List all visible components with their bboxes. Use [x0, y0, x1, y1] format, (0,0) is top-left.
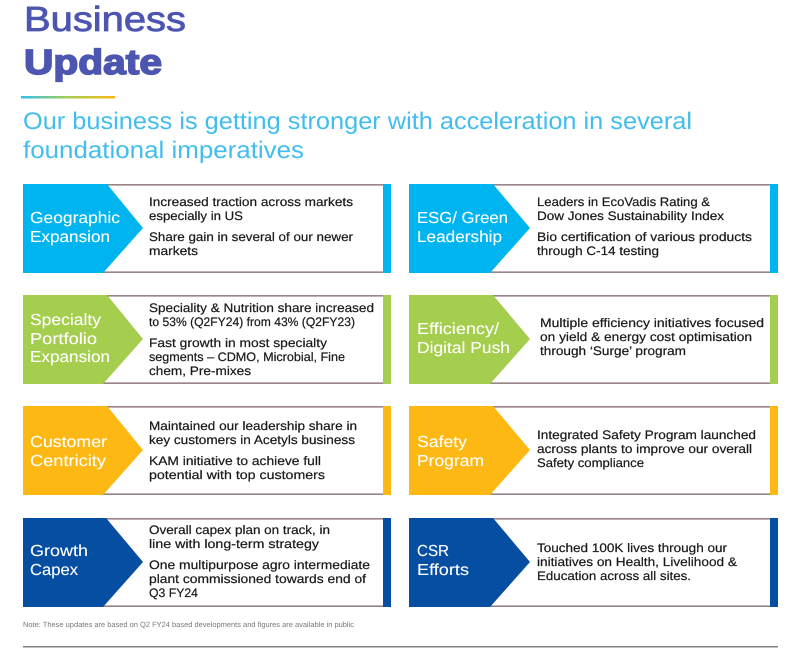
arrow label: specialty portfolio expansion: Portfolio: [30, 331, 97, 348]
text: customer centricity: Maintained our leadership share in: [149, 419, 357, 433]
text: efficiency digital push: on yield & energy cost optimisation: [540, 330, 752, 344]
arrow label: csr efforts: CSR: [417, 543, 449, 560]
arrow label: safety program: [409, 406, 530, 495]
text: geographic expansion: Increased traction across markets: [149, 195, 353, 209]
text: geographic expansion: Share gain in several of our newer: [149, 230, 353, 244]
text: growth capex: [149, 523, 370, 600]
panel: safety program: [409, 406, 778, 495]
panel: geographic expansion: [23, 184, 391, 273]
text: csr efforts: [537, 541, 738, 583]
subtitle: foundational imperatives: [23, 137, 304, 164]
arrow label: growth capex: Growth: [30, 543, 88, 560]
text: esg green leadership: Dow Jones Sustainability Index: [537, 209, 725, 223]
arrow label: geographic expansion: [23, 184, 143, 273]
footer rule: [23, 646, 778, 648]
text: efficiency digital push: through ‘Surge’ program: [540, 344, 686, 358]
text: growth capex: One multipurpose agro intermediate: [149, 558, 370, 572]
text: specialty portfolio expansion: segments – CDMO, Microbial, Fine: [149, 350, 345, 364]
arrow label: csr efforts: [409, 518, 530, 607]
text: geographic expansion: especially in US: [149, 209, 243, 223]
arrow label: customer centricity: Centricity: [30, 453, 106, 470]
text: growth capex: line with long-term strategy: [149, 537, 320, 551]
text: geographic expansion: markets: [149, 244, 198, 258]
arrow label: esg green leadership: Leadership: [417, 229, 502, 246]
text: customer centricity: KAM initiative to achieve full: [149, 454, 321, 468]
text: specialty portfolio expansion: to 53% (Q2FY24) from 43% (Q2FY23): [149, 315, 355, 329]
arrow label: safety program: Program: [417, 453, 484, 470]
text: specialty portfolio expansion: [149, 301, 374, 378]
text: esg green leadership: through C-14 testing: [537, 244, 659, 258]
text: efficiency digital push: Multiple efficiency initiatives focused: [540, 316, 764, 330]
arrow label: efficiency digital push: Efficiency/: [417, 321, 500, 338]
text: growth capex: Q3 FY24: [149, 586, 198, 600]
arrow label: safety program: Safety: [417, 434, 467, 451]
title: Update: [24, 43, 162, 82]
text: geographic expansion: [149, 195, 353, 258]
arrow label: efficiency digital push: Digital Push: [417, 340, 510, 357]
text: safety program: across plants to improve our overall: [537, 442, 752, 456]
text: csr efforts: Education across all sites.: [537, 569, 691, 583]
text: specialty portfolio expansion: Speciality & Nutrition share increased: [149, 301, 374, 315]
arrow label: esg green leadership: ESG/ Green: [417, 210, 508, 227]
text: esg green leadership: [537, 195, 752, 258]
subtitle: [23, 108, 692, 164]
arrow label: geographic expansion: Expansion: [30, 229, 110, 246]
arrow label: growth capex: [23, 518, 143, 607]
text: csr efforts: initiatives on Health, Livelihood &: [537, 555, 738, 569]
text: growth capex: Overall capex plan on track, in: [149, 523, 330, 537]
arrow label: efficiency digital push: [409, 295, 530, 384]
text: esg green leadership: Bio certification of various products: [537, 230, 752, 244]
text: specialty portfolio expansion: chem, Pre-mixes: [149, 364, 251, 378]
text: safety program: Safety compliance: [537, 456, 644, 470]
arrow label: specialty portfolio expansion: Specialty: [30, 312, 101, 329]
arrow label: esg green leadership: [409, 184, 530, 273]
footnote: Note: These updates are based on Q2 FY24 based developments and figures are available in public: [23, 620, 354, 629]
arrow label: growth capex: Capex: [30, 562, 78, 579]
panel: csr efforts: [409, 518, 778, 607]
text: customer centricity: [149, 419, 357, 482]
arrow label: geographic expansion: Geographic: [30, 210, 120, 227]
text: customer centricity: key customers in Acetyls business: [149, 433, 355, 447]
panel: efficiency digital push: [409, 295, 778, 384]
text: csr efforts: Touched 100K lives through our: [537, 541, 727, 555]
text: safety program: [537, 428, 756, 470]
text: customer centricity: potential with top customers: [149, 468, 325, 482]
title: [24, 0, 186, 82]
panel: specialty portfolio expansion: [23, 295, 391, 384]
text: safety program: Integrated Safety Program launched: [537, 428, 756, 442]
arrow label: csr efforts: Efforts: [417, 562, 469, 579]
arrow label: specialty portfolio expansion: [23, 295, 143, 384]
arrow label: customer centricity: [23, 406, 143, 495]
arrow label: specialty portfolio expansion: Expansion: [30, 349, 110, 366]
title: Business: [24, 0, 186, 39]
accent line: [21, 96, 115, 98]
subtitle: Our business is getting stronger with acceleration in several: [23, 108, 692, 135]
text: growth capex: plant commissioned towards end of: [149, 572, 367, 586]
panel: growth capex: [23, 518, 391, 607]
text: esg green leadership: Leaders in EcoVadis Rating &: [537, 195, 711, 209]
panel: customer centricity: [23, 406, 391, 495]
panel: esg green leadership: [409, 184, 778, 273]
text: efficiency digital push: [540, 316, 764, 358]
text: specialty portfolio expansion: Fast growth in most specialty: [149, 336, 328, 350]
arrow label: customer centricity: Customer: [30, 434, 108, 451]
